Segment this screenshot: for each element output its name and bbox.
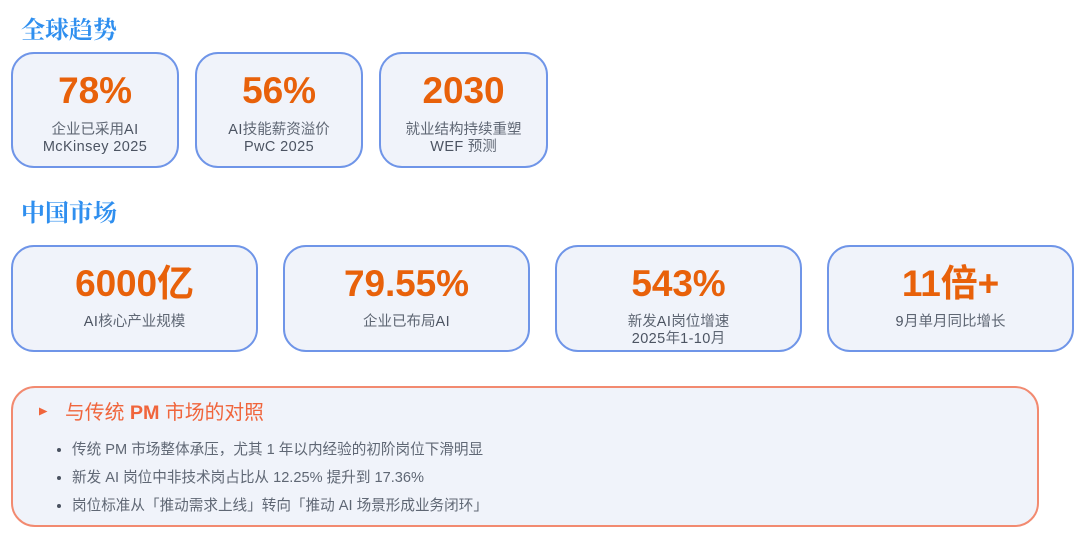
bullet dot 2 [57, 476, 61, 480]
stat card: 6000亿 [11, 245, 258, 352]
stat card: 2030 [379, 52, 548, 168]
stat card: 78% [11, 52, 179, 168]
icon: triangle marker [39, 408, 48, 416]
stat card: 11倍+ [827, 245, 1074, 352]
number: 56% [242, 70, 316, 111]
caption: 就业结构持续重塑 [406, 122, 522, 138]
caption: 新发AI岗位增速 [628, 314, 729, 330]
heading: China market: 中国市场 [21, 193, 117, 228]
number: 11倍+ [902, 263, 999, 304]
caption: 2025年1-10月 [632, 331, 725, 347]
number: 6000亿 [75, 263, 194, 304]
caption [628, 313, 729, 347]
number: 78% [58, 70, 132, 111]
bullet 1: 传统 PM 市场整体承压，尤其 1 年以内经验的初阶岗位下滑明显 [72, 442, 483, 458]
stat card: 79.55% [283, 245, 530, 352]
caption: McKinsey 2025 [43, 139, 147, 155]
bullet 2: 新发 AI 岗位中非技术岗占比从 12.25% 提升到 17.36% [72, 470, 424, 486]
caption: WEF 预测 [430, 139, 497, 155]
caption: 9月单月同比增长 [896, 314, 1005, 330]
number: 79.55% [344, 263, 469, 304]
caption: AI技能薪资溢价 [228, 122, 330, 138]
caption [228, 121, 330, 155]
stat card: 543% [555, 245, 802, 352]
stat card: 56% [195, 52, 363, 168]
bullet 3: 岗位标准从「推动需求上线」转向「推动 AI 场景形成业务闭环」 [72, 498, 488, 514]
caption: AI核心产业规模 [84, 314, 185, 330]
bullet dot 3 [57, 504, 61, 508]
heading: global trends: 全球趋势 [21, 10, 117, 45]
caption [43, 121, 147, 155]
number: 2030 [423, 70, 504, 111]
panel title: 与传统 PM 市场的对照 [65, 402, 264, 424]
caption: 企业已采用AI [52, 122, 138, 138]
caption [406, 121, 522, 155]
caption: 企业已布局AI [363, 314, 450, 330]
number: 543% [631, 263, 726, 304]
caption: PwC 2025 [244, 139, 314, 155]
bullet dot 1 [57, 448, 61, 452]
panel: comparison with traditional PM market [11, 386, 1039, 527]
